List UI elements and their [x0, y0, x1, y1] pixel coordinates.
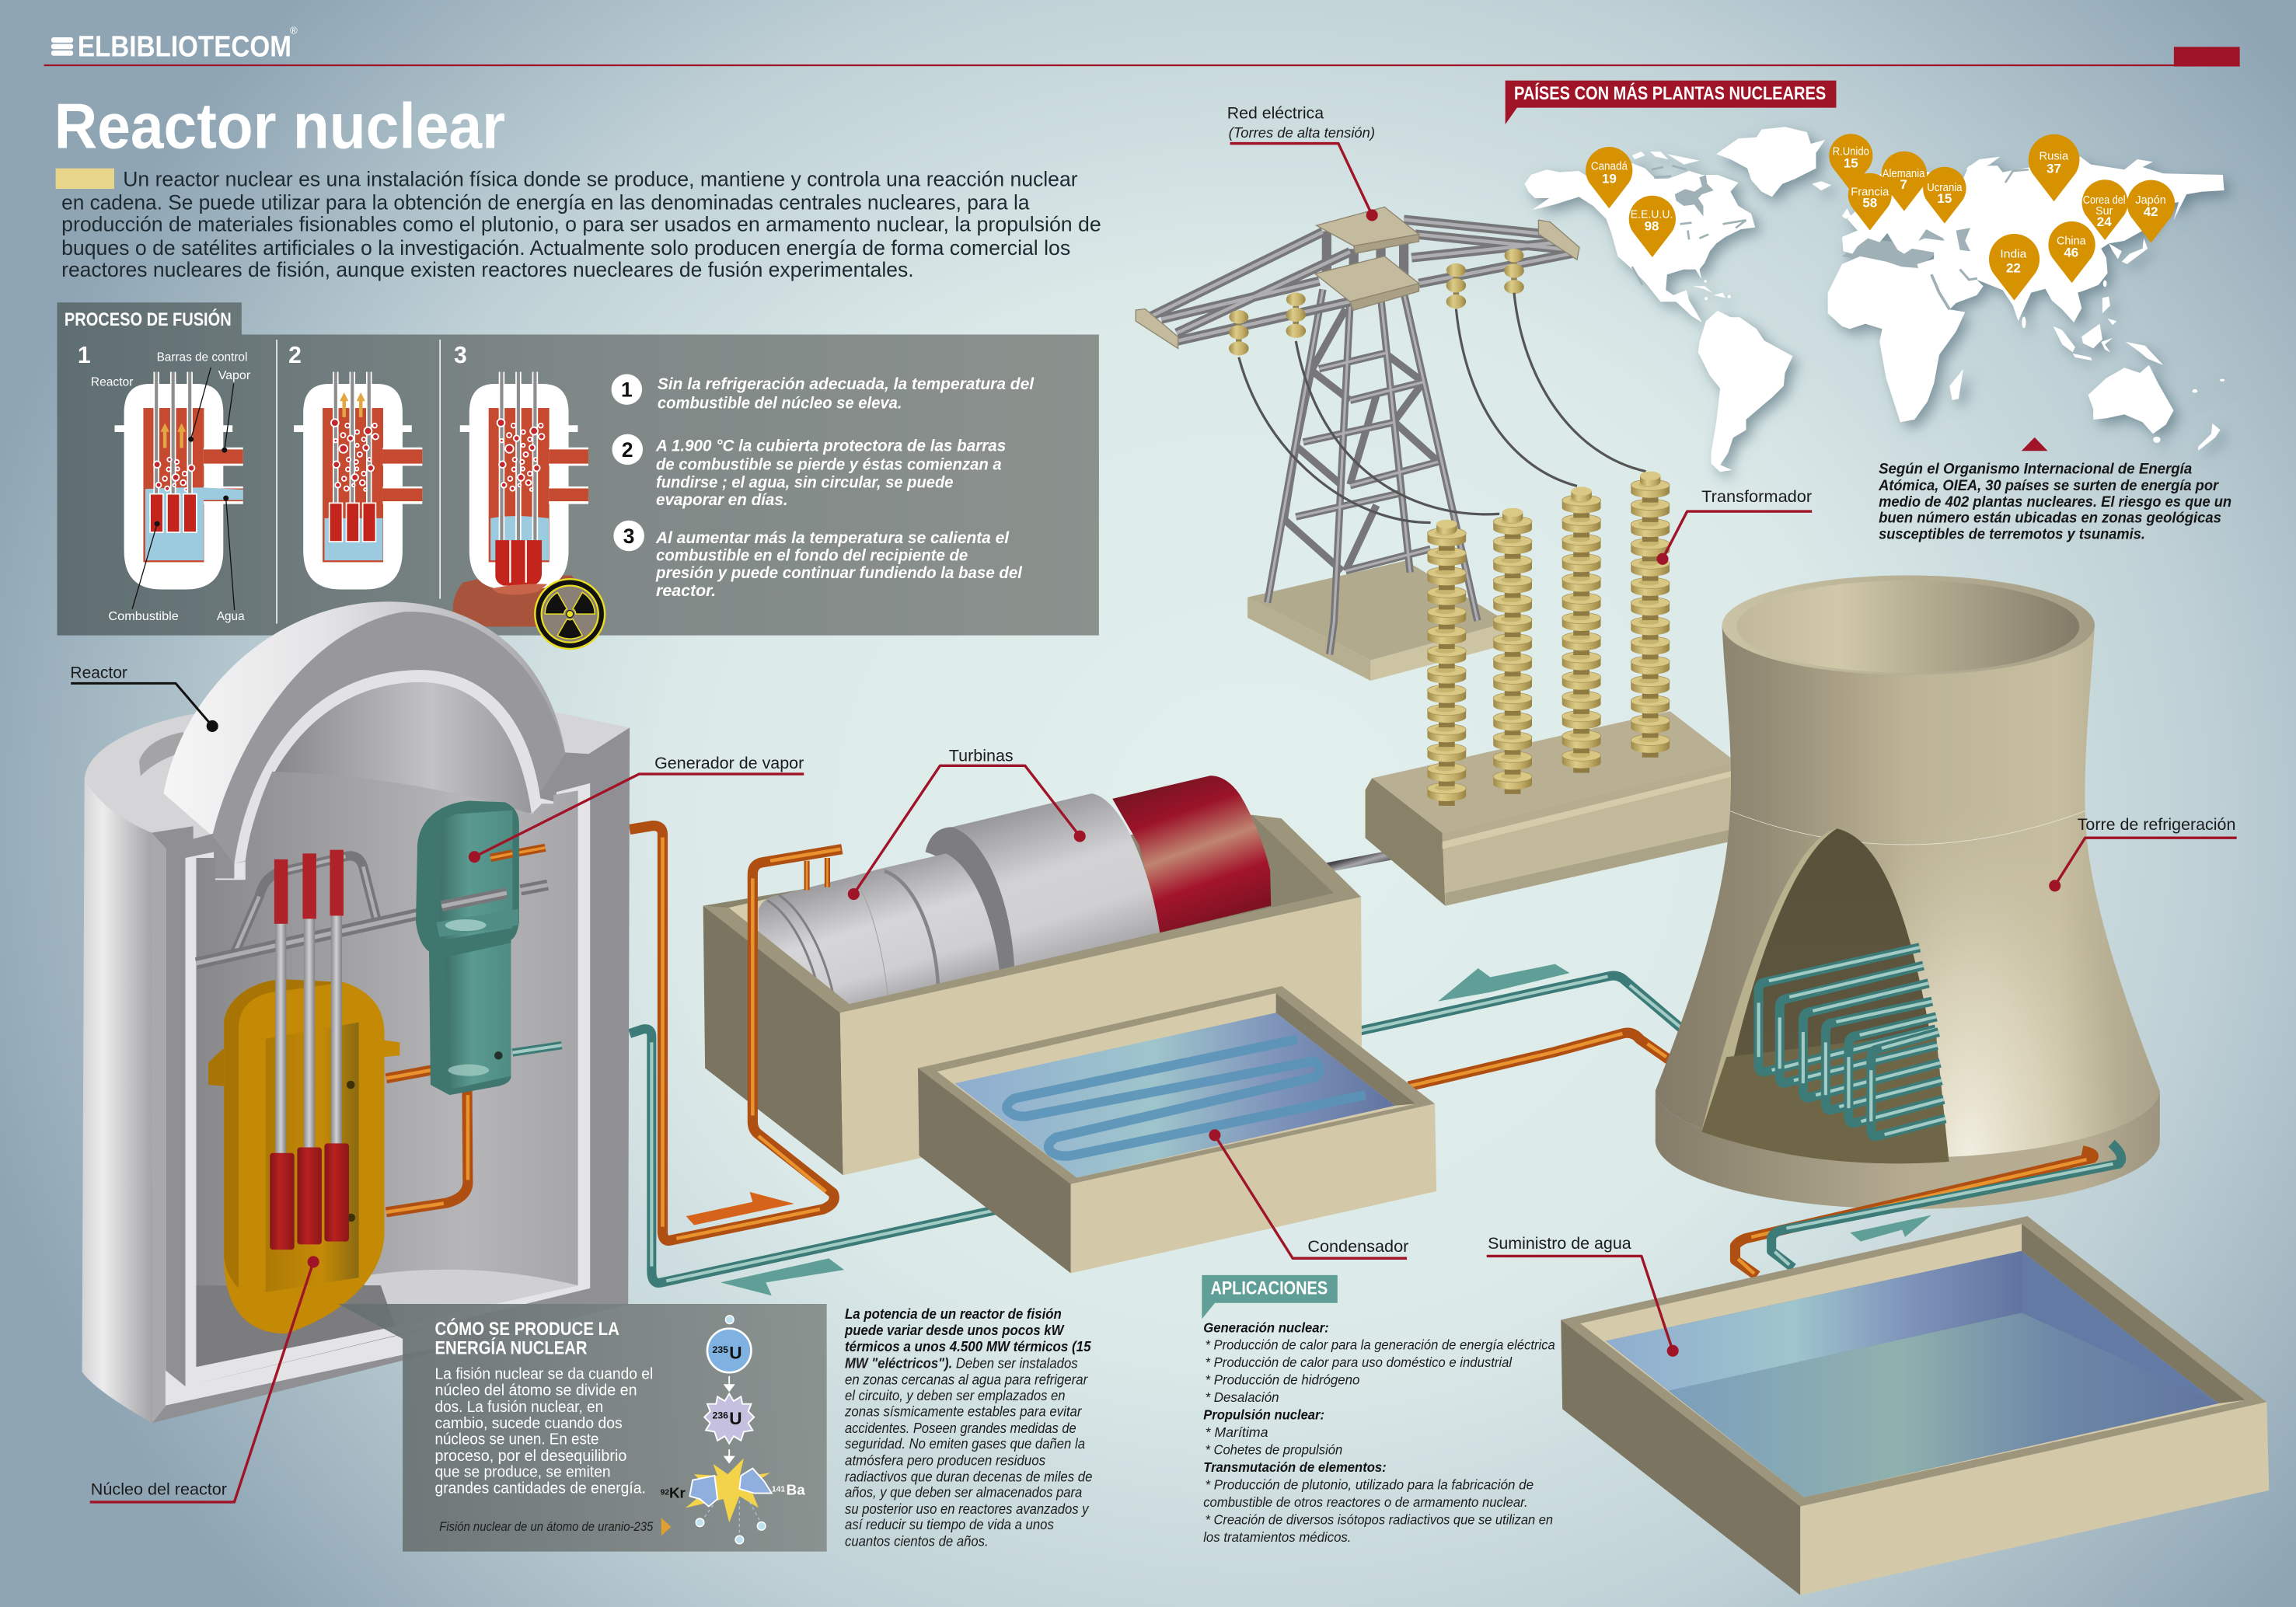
numbered list: de combustible se pierde y éstas comienzan a	[656, 456, 1002, 474]
melt blob	[453, 575, 579, 626]
tower shell	[1656, 625, 2160, 1158]
nose	[759, 895, 834, 999]
condenser coil	[1007, 1040, 1366, 1156]
reactor vessel	[208, 979, 400, 1333]
list: Generación nuclear:	[1203, 1319, 1329, 1335]
section walls	[152, 727, 630, 1423]
reactor diagram 1	[115, 372, 243, 589]
list: * Producción de calor para uso doméstico e industrial	[1205, 1354, 1513, 1370]
big cylinder	[952, 793, 1160, 966]
title: Reactor nuclear	[54, 89, 505, 162]
block faces	[703, 906, 843, 1175]
numbered list: 1	[621, 378, 633, 402]
list: Transmutación de elementos:	[1203, 1459, 1387, 1475]
panel body: La fisión nuclear se da cuando el	[435, 1366, 653, 1383]
numbered list: Sin la refrigeración adecuada, la temperatura del	[658, 375, 1035, 393]
tower base	[1247, 561, 1508, 681]
potencia text: accidentes. Poseen grandes medidas de	[845, 1421, 1076, 1436]
pin: Japón: 42	[2144, 204, 2158, 219]
banner	[1202, 1275, 1338, 1319]
pin: R.Unido	[1829, 134, 1872, 191]
pin: Alemania: 7	[1900, 177, 1907, 192]
map note: buen número están ubicadas en zonas geológicas	[1879, 510, 2221, 527]
panel background	[57, 302, 1099, 636]
reactor building	[82, 601, 630, 1423]
diagram labels: Vapor	[218, 369, 250, 382]
fission diagram	[661, 1316, 805, 1544]
world map	[1525, 127, 2224, 472]
fission diagram: U	[729, 1343, 742, 1362]
potencia text: térmicos a unos 4.500 MW térmicos (15	[845, 1339, 1091, 1354]
numbered list	[612, 374, 1035, 600]
panel heading	[435, 1318, 619, 1359]
label: suministro de agua	[1487, 1233, 1679, 1357]
pin: Corea del Sur: Sur	[2095, 205, 2113, 218]
list: * Cohetes de propulsión	[1205, 1442, 1342, 1458]
pin: Rusia	[2029, 134, 2079, 201]
gray pipes	[196, 856, 425, 964]
pin: Francia: 58	[1862, 196, 1877, 211]
fission diagram: 236	[713, 1410, 728, 1421]
panel body: núcleos se unen. En este	[435, 1431, 599, 1448]
step numbers: 3	[454, 343, 467, 368]
pin: Rusia: 37	[2047, 161, 2061, 176]
list: * Marítima	[1205, 1424, 1268, 1440]
fission diagram: Ba	[787, 1481, 805, 1497]
white lining	[166, 783, 590, 1406]
steam pipes	[630, 826, 842, 1240]
pin: Japón	[2127, 180, 2175, 243]
pin: Francia	[1848, 173, 1892, 231]
pin: Ucrania: Ucrania	[1927, 182, 1963, 194]
fission diagram: 141	[772, 1486, 785, 1494]
transformer columns	[1427, 472, 1670, 806]
potencia text: su posterior uso en reactores avanzados y	[845, 1501, 1089, 1517]
pin: India: 22	[2006, 260, 2021, 275]
header tab	[2174, 47, 2240, 67]
pin: China	[2048, 221, 2095, 283]
shaft	[1324, 852, 1407, 868]
top surface	[85, 688, 630, 842]
arrow: supply	[1850, 1215, 1931, 1242]
pin: Rusia: Rusia	[2040, 150, 2068, 162]
pin: China: 46	[2064, 246, 2078, 260]
diagram labels: Reactor	[91, 375, 133, 389]
insulators	[1229, 249, 1524, 355]
label: condensador	[1209, 1129, 1408, 1258]
return pipe	[630, 1029, 1000, 1283]
panel body	[435, 1366, 653, 1497]
panel: cómo se produce	[338, 1304, 827, 1552]
logo: ELBIBLIOTECOM	[78, 30, 291, 63]
label: torre de refrigeración: Torre de refrigeración	[2078, 814, 2235, 834]
potencia text: el circuito, y deben ser emplazados en	[845, 1388, 1066, 1403]
pipes to cooling tower	[1344, 976, 1684, 1086]
map note: medio de 402 plantas nucleares. El riesgo es que un	[1879, 493, 2231, 511]
tank water	[1606, 1251, 2218, 1497]
arrow: cold water	[1438, 964, 1570, 1002]
label: transformador	[1656, 486, 1812, 565]
list: * Producción de plutonio, utilizado para la fabricación de	[1205, 1477, 1534, 1493]
intro text: buques o de satélites artificiales o la investigación. Actualmente solo producen energía de forma comercial los	[61, 236, 1070, 260]
list: combustible de otros reactores o de armamento nuclear.	[1203, 1494, 1528, 1510]
cooling tower	[1656, 575, 2160, 1209]
diagram labels	[91, 350, 250, 623]
potencia text: La potencia de un reactor de fisión	[845, 1306, 1062, 1322]
pin: EEUU	[1629, 196, 1676, 257]
list: * Creación de diversos isótopos radiactivos que se utilizan en	[1205, 1512, 1553, 1528]
pin: Francia: Francia	[1851, 186, 1889, 199]
floor	[359, 1270, 578, 1326]
water supply pipes	[1735, 1143, 2121, 1276]
step numbers: 1	[78, 343, 91, 368]
panel body: grandes cantidades de energía.	[435, 1480, 646, 1497]
numbered list: reactor.	[656, 582, 716, 600]
potencia text: en zonas cercanas al agua para refrigerar	[845, 1372, 1088, 1387]
pin: Canadá	[1586, 147, 1632, 208]
reactor diagram 2	[294, 372, 422, 589]
panel: proceso de fusión	[57, 302, 1099, 650]
arrow: return	[721, 1258, 844, 1295]
header	[44, 24, 2240, 67]
numbered list: presión y puede continuar fundiendo la base del	[655, 564, 1023, 582]
potencia text: años, y que deben ser almacenados para	[845, 1485, 1082, 1501]
step numbers	[78, 343, 467, 368]
banner: APLICACIONES	[1210, 1278, 1328, 1298]
fission diagram: Kr	[669, 1484, 686, 1501]
condenser	[918, 986, 1436, 1273]
steam generator	[416, 801, 562, 1095]
label: turbinas: Turbinas	[949, 746, 1014, 765]
radiation symbol	[534, 578, 605, 650]
generator	[1112, 776, 1271, 932]
numbered list: Al aumentar más la temperatura se calienta el	[655, 529, 1010, 547]
pin: Canadá: 19	[1602, 171, 1617, 186]
pins	[1586, 134, 2175, 301]
label: núcleo del reactor: Núcleo del reactor	[91, 1479, 227, 1498]
intro text: en cadena. Se puede utilizar para la obtención de energía en las denominadas centrales nucleares, para la	[61, 190, 1030, 214]
mid cylinder	[877, 853, 1000, 1010]
panel heading: CÓMO SE PRODUCE LA	[435, 1318, 619, 1340]
intro text: reactores nucleares de fisión, aunque existen reactores nuecleares de fusión experimentales.	[61, 258, 914, 281]
potencia text: así reducir su tiempo de vida a unos	[845, 1517, 1054, 1532]
banner: países	[1506, 81, 1836, 124]
tower base ring	[1656, 1091, 2160, 1209]
map note	[1878, 437, 2231, 542]
label: reactor: Reactor	[70, 662, 127, 681]
pin: Japón: Japón	[2135, 194, 2166, 207]
steam generator pipes	[386, 1068, 468, 1212]
pin: EEUU: 98	[1645, 219, 1659, 234]
potencia text	[844, 1306, 1092, 1549]
arrow: steam	[686, 1192, 794, 1225]
cavity	[196, 772, 578, 1367]
potencia text: zonas sísmicamente estables para evitar	[844, 1404, 1082, 1420]
pin: R.Unido: 15	[1844, 156, 1858, 171]
cables	[1239, 293, 1646, 523]
caption: Fisión nuclear de un átomo de uranio-235	[439, 1519, 654, 1534]
pin: China: China	[2057, 235, 2086, 248]
numbered list: combustible del núcleo se eleva.	[658, 395, 902, 413]
banner: países: PAÍSES CON MÁS PLANTAS NUCLEARES	[1514, 82, 1826, 104]
diagram labels: Agua	[217, 610, 245, 623]
panel body: cambio, sucede cuando dos	[435, 1415, 623, 1432]
diagram leader lines	[132, 368, 235, 610]
potencia text: cuantos cientos de años.	[845, 1533, 989, 1549]
label: red eléctrica: Red eléctrica	[1227, 103, 1324, 123]
label: turbinas	[848, 746, 1086, 900]
block interior	[703, 815, 1361, 1013]
tower opening	[1736, 580, 2079, 673]
potencia text: puede variar desde unos pocos kW	[844, 1323, 1065, 1338]
list: Propulsión nuclear:	[1203, 1407, 1324, 1423]
list	[1203, 1319, 1555, 1545]
diagram labels: Combustible	[108, 610, 179, 623]
panel body: que se produce, se emiten	[435, 1464, 611, 1481]
fission diagram: 235	[713, 1344, 728, 1355]
panel heading: ENERGÍA NUCLEAR	[435, 1337, 588, 1359]
fission diagram: 92	[661, 1488, 669, 1497]
dome outer	[163, 601, 565, 836]
diagram labels: Barras de control	[157, 350, 247, 364]
cooling coils	[1759, 947, 1945, 1136]
panel: aplicaciones	[1202, 1275, 1555, 1545]
pin: Alemania	[1882, 152, 1927, 211]
tower rim	[1722, 575, 2095, 675]
pin: R.Unido: R.Unido	[1833, 146, 1869, 159]
map note: Según el Organismo Internacional de Energía	[1879, 460, 2192, 477]
label: condensador: Condensador	[1307, 1236, 1408, 1256]
pin: India	[1989, 234, 2040, 301]
potencia text: atmósfera pero producen residuos	[845, 1452, 1045, 1468]
step numbers: 2	[288, 343, 302, 368]
numbered list: 2	[622, 438, 633, 462]
transformer base	[1366, 711, 1735, 906]
pin: Canadá: Canadá	[1591, 161, 1628, 173]
panel body: dos. La fusión nuclear, en	[435, 1399, 603, 1416]
panel heading: PROCESO DE FUSIÓN	[65, 309, 232, 330]
panel body: proceso, por el desequilibrio	[435, 1448, 626, 1465]
label: red eléctrica: (Torres de alta tensión)	[1229, 124, 1375, 141]
pin: EEUU: E.E.U.U.	[1631, 209, 1673, 221]
numbered list: 3	[623, 525, 634, 548]
list: * Desalación	[1205, 1389, 1279, 1405]
map note: susceptibles de terremotos y tsunamis.	[1879, 525, 2145, 542]
door	[1701, 828, 1949, 1163]
condenser water	[954, 1013, 1395, 1177]
dome section	[212, 612, 565, 864]
pin: Alemania: Alemania	[1883, 168, 1924, 180]
label: red eléctrica	[1227, 103, 1378, 221]
label: transformador: Transformador	[1701, 486, 1812, 506]
intro text	[56, 167, 1101, 281]
panel background	[338, 1304, 827, 1552]
numbered list: evaporar en días.	[656, 491, 788, 509]
list: los tratamientos médicos.	[1203, 1529, 1351, 1545]
intro text: Un reactor nuclear es una instalación física donde se produce, mantiene y controla una reacción nuclear	[123, 167, 1078, 190]
map inland water	[1632, 166, 1746, 285]
list: * Producción de hidrógeno	[1205, 1372, 1360, 1388]
americas	[1525, 127, 1851, 472]
label: torre de refrigeración	[2049, 814, 2237, 891]
list: * Producción de calor para la generación de energía eléctrica	[1205, 1337, 1555, 1353]
tower arms	[1150, 220, 1572, 341]
water tank	[1561, 1216, 2269, 1595]
label: suministro de agua: Suministro de agua	[1488, 1233, 1632, 1253]
eurasia africa oceania	[1828, 157, 2224, 451]
potencia text: MW "eléctricos"). Deben ser instalados	[845, 1356, 1078, 1372]
outer cylinder	[82, 779, 152, 1423]
numbered list: A 1.900 °C la cubierta protectora de las barras	[655, 437, 1006, 455]
tower lattice	[1268, 289, 1478, 654]
arm plates	[1136, 207, 1579, 348]
logo: ®	[290, 24, 298, 36]
turbine body	[759, 776, 1271, 1017]
control rods	[270, 850, 349, 1250]
map note: Atómica, OIEA, 30 países se surten de energía por	[1878, 477, 2219, 494]
pin: Corea del Sur	[2082, 180, 2128, 240]
intro text: producción de materiales fisionables como el plutonio, o para ser usados en armamento nuclear, la propulsión de	[61, 213, 1101, 236]
pin: Ucrania: 15	[1937, 191, 1952, 206]
numbered list: combustible en el fondo del recipiente de	[656, 547, 968, 565]
potencia text: radiactivos que duran decenas de miles de	[845, 1469, 1092, 1485]
header rule	[44, 64, 2175, 66]
label: reactor	[70, 662, 218, 732]
pin: Corea del Sur: Corea del	[2083, 194, 2126, 207]
pin: India: India	[2000, 249, 2026, 261]
label: generador de vapor: Generador de vapor	[654, 753, 804, 772]
electric tower	[1136, 207, 1646, 681]
turbine block	[703, 776, 1362, 1175]
reactor diagram 3	[460, 372, 588, 594]
potencia text: seguridad. No emiten gases que dañen la	[845, 1436, 1085, 1452]
pin: Ucrania	[1923, 167, 1966, 224]
numbered list: fundirse ; el agua, sin circular, se puede	[656, 473, 954, 491]
fission diagram: U	[729, 1409, 742, 1428]
label: generador de vapor	[469, 753, 804, 863]
pin: Corea del Sur: 24	[2097, 214, 2112, 229]
label: núcleo del reactor	[90, 1256, 319, 1502]
panel body: núcleo del átomo se divide en	[435, 1382, 637, 1399]
small cylinder	[779, 870, 938, 1017]
